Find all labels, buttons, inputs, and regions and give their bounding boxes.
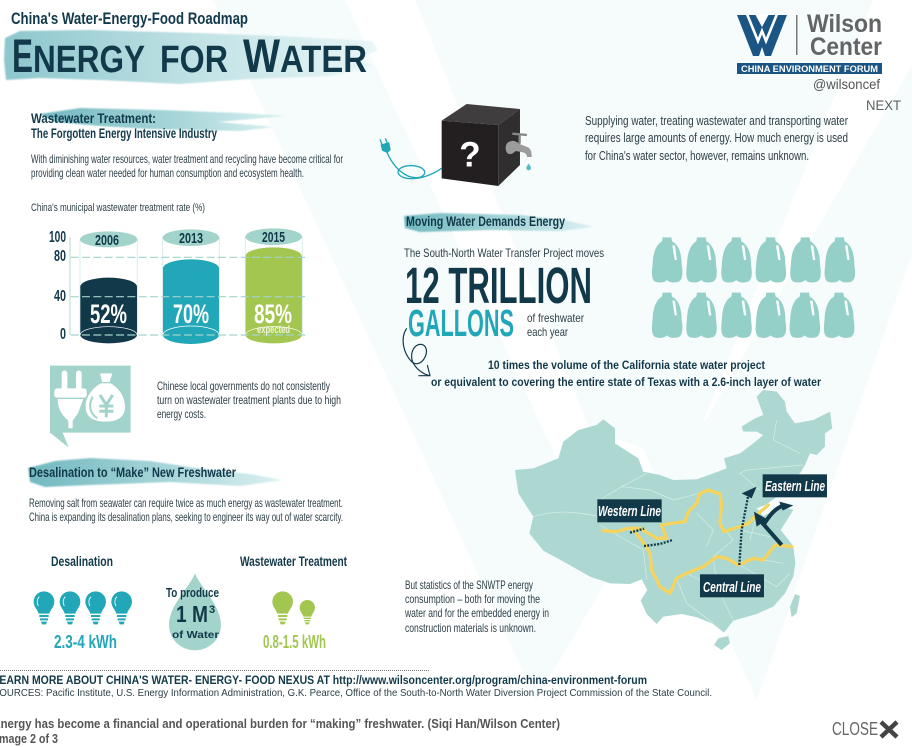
title brush stroke	[4, 30, 378, 84]
icon: green bulbs	[272, 591, 315, 624]
handle: @wilsoncef	[813, 76, 880, 92]
text: local governments	[157, 379, 341, 421]
logo: Wilson Center: Center	[810, 33, 882, 61]
arrows	[742, 487, 757, 498]
icon: black box with plug and tap: ?	[459, 136, 481, 175]
text: supplying water	[585, 114, 848, 163]
next link: NEXT	[866, 97, 901, 113]
panel: moving water: of freshwater	[527, 311, 584, 325]
text: supplying water: requires large amounts of energy. How much energy is used	[585, 131, 848, 145]
chart: wastewater treatment rate cylinders: 2013	[179, 230, 203, 247]
chart: wastewater treatment rate cylinders: 40	[54, 288, 66, 305]
map outline	[515, 390, 832, 633]
intro text: With diminishing water resources, water treatment and recycling have become critical for	[31, 152, 343, 166]
cylinder 2013	[163, 229, 219, 344]
cylinder 2015	[245, 228, 302, 343]
logo name: Wilson	[807, 10, 882, 38]
panel: desalination	[28, 458, 343, 524]
comparison text: 10 times the volume of the California state water project	[488, 358, 765, 372]
panel: desalination: China is expanding its desalination plans, seeking to engineer its way out of water scarcity.	[29, 510, 343, 524]
routes	[603, 490, 792, 593]
icon: water drop	[169, 573, 221, 650]
heading brush stroke	[40, 108, 286, 131]
panel: wastewater treatment	[31, 108, 343, 214]
text: local governments: Chinese local governments do not consistently	[157, 379, 330, 393]
text: SNWTP statistics: water and for the embedded energy in	[404, 606, 549, 620]
heading brush stroke	[28, 458, 282, 487]
province borders	[533, 420, 803, 623]
icons: water jugs	[652, 237, 855, 338]
chart: wastewater treatment rate cylinders: expected	[257, 324, 290, 336]
chart: wastewater treatment rate cylinders: 85%	[254, 299, 292, 329]
text: local governments: energy costs.	[157, 407, 206, 421]
logo: Wilson Center: CHINA ENVIRONMENT FORUM	[741, 64, 878, 74]
chart: wastewater treatment rate cylinders: 0	[60, 326, 66, 343]
title: W	[243, 29, 281, 82]
text: supplying water: Supplying water, treating wastewater and transporting water	[585, 114, 848, 128]
comparison: energy to produce 1 cubic metre: 1 M	[176, 601, 208, 627]
comparison: energy to produce 1 cubic metre: Desalination	[51, 553, 113, 569]
cylinder 2006	[80, 231, 137, 343]
panel: wastewater treatment: The Forgotten Energy Intensive Industry	[31, 125, 217, 141]
title: NERGY	[33, 39, 145, 81]
heading: Desalination to “Make” New Freshwater	[29, 464, 236, 480]
comparison: energy to produce 1 cubic metre: 3	[209, 604, 215, 616]
cord	[386, 150, 442, 179]
unit: GALLONS	[408, 303, 514, 345]
text: supplying water: for China's water sector, however, remains unknown.	[585, 149, 809, 163]
subtitle: China's Water-Energy-Food Roadmap	[11, 9, 248, 28]
heading brush stroke	[404, 213, 594, 232]
logo divider	[796, 15, 798, 55]
footer	[0, 670, 712, 746]
chart: wastewater treatment rate cylinders	[49, 228, 308, 344]
year labels: 2006	[95, 232, 119, 249]
comparison: energy to produce 1 cubic metre: 0.8-1.5 kWh	[263, 632, 326, 652]
map: China with water transfer routes: Central Line	[703, 580, 761, 596]
map: China with water transfer routes: Western Line	[598, 504, 661, 520]
comparison: energy to produce 1 cubic metre	[34, 553, 347, 652]
text: SNWTP statistics	[404, 578, 549, 635]
comparison: energy to produce 1 cubic metre: of Water	[172, 629, 219, 641]
logo: Wilson Center	[737, 10, 882, 92]
intro: The South-North Water Transfer Project moves	[404, 246, 604, 260]
axis labels: 100	[49, 229, 66, 246]
heading: Moving Water Demands Energy	[406, 213, 565, 229]
panel: moving water	[403, 213, 855, 389]
value labels: 52%	[90, 299, 127, 329]
icon: plug and money bag callout	[50, 366, 131, 448]
close button: CLOSE	[832, 719, 878, 739]
panel: wastewater treatment: providing clean water needed for human consumption and ecosystem health.	[31, 166, 304, 180]
cube	[442, 121, 498, 186]
title: ATER	[280, 39, 367, 81]
map: China with water transfer routes: Eastern Line	[765, 479, 825, 495]
chart: wastewater treatment rate cylinders: 70%	[173, 299, 209, 329]
arrow: swirl	[403, 328, 430, 376]
text: SNWTP statistics: But statistics of the SNWTP energy	[405, 578, 533, 592]
title: E	[12, 29, 33, 82]
heading: Wastewater Treatment:	[31, 110, 156, 126]
icon: black box with plug and tap	[380, 104, 532, 186]
text: Removing salt from seawater can require twice as much energy as wastewater treatment.	[29, 496, 343, 510]
logo bar	[737, 63, 882, 74]
icon: W mark	[737, 14, 787, 56]
comparison: energy to produce 1 cubic metre: Wastewater Treatment	[240, 553, 347, 569]
tap	[506, 141, 532, 157]
route labels	[597, 499, 662, 522]
text: SNWTP statistics: construction materials is unknown.	[405, 621, 536, 635]
map: China with water transfer routes	[515, 390, 832, 650]
caption: Energy has become a financial and operational burden for “making” freshwater. (Siqi Han/Wilson Center)	[0, 717, 560, 731]
icon: teal bulbs	[34, 591, 132, 624]
title	[12, 29, 367, 82]
chart: wastewater treatment rate cylinders: 2015	[262, 229, 285, 246]
comparison: energy to produce 1 cubic metre: 2.3-4 kWh	[54, 632, 117, 652]
learn more: LEARN MORE ABOUT CHINA'S WATER- ENERGY- FOOD NEXUS AT http://www.wilsoncenter.org/program/china-environment-forum	[0, 675, 647, 687]
chart label: China's municipal wastewater treatment rate (%)	[31, 202, 205, 214]
title: FOR	[160, 39, 228, 81]
text: SNWTP statistics: consumption – both for moving the	[405, 592, 540, 606]
panel: moving water: each year	[527, 325, 568, 339]
big number: 12 TRILLION	[405, 257, 592, 314]
comparison: energy to produce 1 cubic metre: To produce	[166, 585, 219, 600]
panel: moving water: or equivalent to covering the entire state of Texas with a 2.6-inch layer of water	[431, 375, 821, 389]
sources: SOURCES: Pacific Institute, U.S. Energy Information Administration, G.K. Pearce, Office of the South-to-North Water Diversion Project Commission of the State Council.	[0, 687, 712, 699]
chart: wastewater treatment rate cylinders: 80	[54, 248, 66, 265]
text: local governments: turn on wastewater treatment plants due to high	[157, 393, 341, 407]
